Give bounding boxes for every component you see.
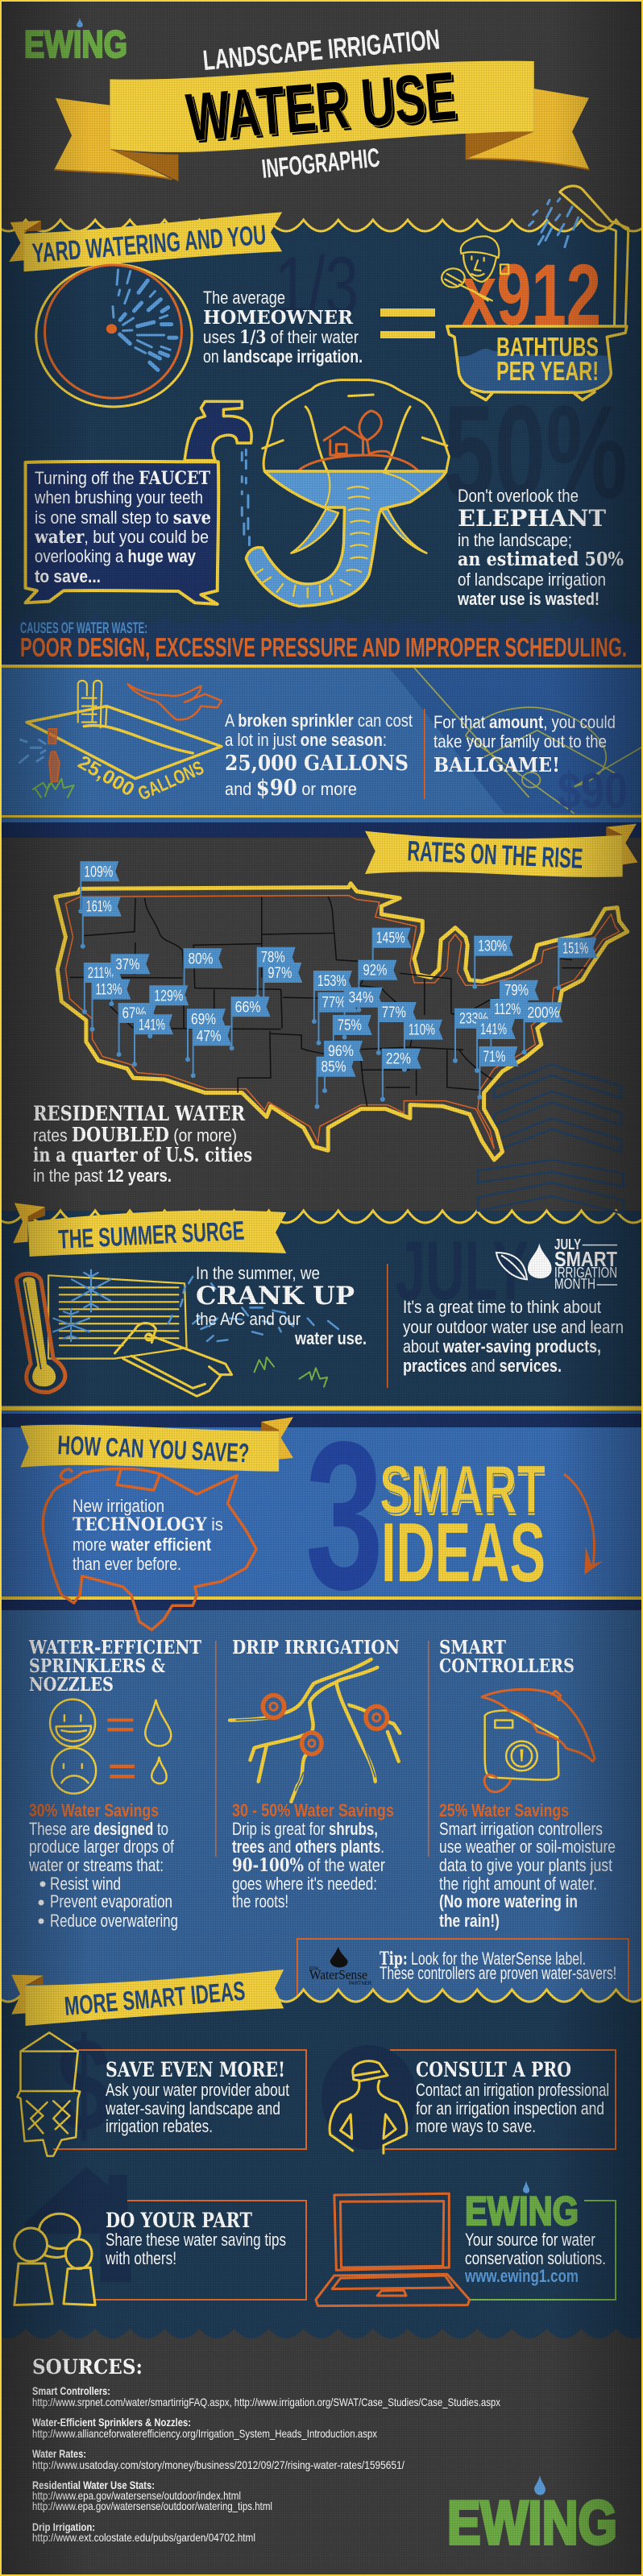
sources list [32, 2384, 500, 2544]
text: ballgame: take your family out to the [434, 731, 607, 752]
banner: summer surge [13, 1203, 286, 1257]
text [105, 2209, 286, 2268]
text: crank up [196, 1263, 367, 1348]
heading [439, 1637, 575, 1677]
icon: orange arrow [564, 1474, 603, 1575]
text: new irrigation technology: than ever before. [73, 1554, 181, 1574]
flag 145% [371, 928, 412, 980]
heading [28, 1637, 201, 1696]
text: www.ewing1.com [464, 2266, 579, 2286]
text: elephant [457, 486, 624, 609]
title ribbon [54, 61, 589, 181]
sources list: http://www.epa.gov/watersense/outdoor/watering_tips.html [32, 2499, 272, 2512]
flag 67% [117, 1003, 158, 1057]
logo: July smart irrigation month [496, 1236, 617, 1292]
flag 97%: 97% [268, 965, 292, 982]
text: great time: about water-saving products, [403, 1336, 601, 1356]
flag 69% [185, 1008, 226, 1062]
text: residential water: rates DOUBLED (or more) [33, 1123, 237, 1146]
flag 141% east [475, 1019, 516, 1073]
body text: Drip is great for shrubs, [232, 1819, 378, 1839]
heading: WATER-EFFICIENT [28, 1637, 201, 1659]
savings: 25% Water Savings [439, 1800, 569, 1820]
text: ballgame [434, 712, 616, 777]
text: broken sprinkler [225, 710, 413, 801]
text: tip [380, 1949, 616, 1983]
sources list: Water Rates: [32, 2447, 86, 2460]
text: smart: SMART [382, 1454, 546, 1530]
flag 77% [316, 992, 358, 1046]
text: elephant: in the landscape; [458, 530, 572, 550]
flag 161% [81, 897, 122, 949]
sources heading: SOURCES: [32, 2355, 143, 2379]
text: ideas: IDEAS [381, 1506, 546, 1600]
icon: roots [230, 1659, 400, 1802]
text: CONSULT A PRO [416, 2058, 571, 2081]
faucet and speech box [26, 401, 251, 604]
heading: SMART [439, 1637, 506, 1659]
body text: the roots! [232, 1891, 288, 1911]
flag 80%: 80% [189, 950, 214, 967]
flag 96% [322, 1041, 363, 1093]
body text: These are designed to [29, 1819, 168, 1839]
shower and bathtub [442, 186, 628, 400]
body text: Reduce overwatering [50, 1911, 178, 1931]
text: irrigation rebates. [106, 2116, 213, 2136]
flag 67%: 67% [122, 1005, 147, 1022]
tip box [297, 1939, 628, 2011]
flag 97% [261, 963, 302, 1001]
text: average homeowner: The average [203, 288, 285, 308]
text: faucet [34, 468, 211, 586]
map of the United States [56, 884, 628, 1160]
body text: Smart irrigation controllers [439, 1819, 603, 1839]
text: 25,000 gallons: 25,000 [74, 752, 138, 801]
banner: more smart ideas [11, 1969, 284, 2026]
text: crank up: the A/C and our [196, 1309, 301, 1329]
flag 37%: 37% [115, 956, 139, 973]
banner: more smart ideas: MORE SMART IDEAS [63, 1976, 247, 2021]
text: smart [380, 1452, 546, 1530]
icon: thermometer, air conditioner and sprinkler [16, 1270, 338, 1396]
flag 141% east: 141% [480, 1021, 507, 1038]
icon: man with brush [442, 236, 508, 300]
banner: rates on the rise [365, 824, 637, 877]
text: great time: It's a great time to think about [403, 1297, 601, 1317]
flag 92% [356, 960, 397, 1013]
flag 129% [147, 985, 189, 1038]
banner: yard watering: YARD WATERING AND YOU [31, 220, 268, 269]
title: landscape irrigation: LANDSCAPE IRRIGATION [201, 23, 442, 77]
heading: NOZZLES [29, 1674, 114, 1696]
text: with others! [105, 2248, 176, 2268]
text: 25,000 gallons [74, 752, 207, 805]
sources list: http://www.allianceforwaterefficiency.org/Irrigation_System_Heads_Introduction.aspx [32, 2427, 377, 2440]
text: elephant: ELEPHANT [458, 505, 606, 532]
text: average homeowner: HOMEOWNER [203, 307, 354, 329]
panel: save even more [17, 2032, 306, 2156]
map flags [78, 861, 597, 1109]
flag 141% [132, 1014, 173, 1066]
text: water-saving landscape and [105, 2098, 280, 2118]
yellow divider lines [0, 665, 643, 1600]
title: infographic: INFOGRAPHIC [260, 143, 381, 184]
icon: faces and drops [50, 1700, 171, 1794]
flag 85%: 85% [321, 1059, 346, 1076]
icon: elephant [246, 380, 449, 607]
flag 77% east [376, 1002, 417, 1055]
flag 22%: 22% [386, 1051, 411, 1068]
text: conservation solutions. [465, 2248, 606, 2268]
logo: Ewing: EWING [465, 2189, 579, 2234]
text: faucet: overlooking a huge way [35, 546, 197, 566]
flag 141%: 141% [139, 1017, 165, 1033]
text: ballgame: For that amount, you could [434, 712, 616, 732]
body text: the right amount of water. [439, 1874, 597, 1894]
flag 233%: 233% [459, 1011, 488, 1028]
text: bathtubs per year: BATHTUBS [496, 332, 599, 362]
text: new irrigation technology: more water efficient [73, 1534, 212, 1555]
text: faucet: water, but you could be [34, 527, 209, 548]
flag 129%: 129% [154, 988, 183, 1004]
text [105, 2058, 289, 2136]
logo: WaterSense: PARTNER [349, 1982, 372, 1986]
body text: goes where it's needed: [232, 1874, 377, 1894]
flag 113%: 113% [95, 982, 122, 999]
text [416, 2058, 609, 2136]
panel: do your part [15, 2201, 306, 2305]
flag 66% [230, 996, 271, 1050]
flag 109% [78, 861, 119, 913]
text: new irrigation technology: TECHNOLOGY is [73, 1514, 223, 1535]
summer surge wave [0, 1211, 643, 1407]
flag 110%: 110% [409, 1022, 435, 1039]
body text [232, 1819, 385, 1911]
sources list: Drip Irrigation: [32, 2520, 95, 2533]
icon: sprinkler circle [36, 264, 192, 407]
flag 71%: 71% [483, 1049, 505, 1066]
sources list: Smart Controllers: [32, 2384, 110, 2397]
sources list: http://www.usatoday.com/story/money/business/2012/09/27/rising-water-rates/1595651/ [32, 2458, 404, 2471]
flag 151%: 151% [562, 940, 588, 957]
sources list: Residential Water Use Stats: [32, 2479, 155, 2491]
text: crank up: CRANK UP [196, 1282, 355, 1311]
flag 200% [522, 1002, 562, 1054]
panel: baseball field background [390, 668, 643, 814]
logo: July smart irrigation month: JULY [554, 1236, 581, 1253]
column: sprinklers and nozzles [28, 1637, 201, 1931]
text: residential water: in the past 12 years. [33, 1166, 172, 1186]
flag 75% [331, 1015, 372, 1067]
text: smart: SMART [380, 1452, 546, 1527]
flag 110% [402, 1020, 443, 1072]
body text: water or streams that: [28, 1855, 164, 1875]
text: crank up: water use. [294, 1328, 367, 1348]
panel: consult a pro [330, 2050, 616, 2153]
flag 47% [191, 1025, 232, 1078]
text: average homeowner [203, 288, 363, 367]
flag 96%: 96% [328, 1043, 354, 1060]
ghost chevrons [478, 1065, 624, 1214]
sources list: http://www.epa.gov/watersense/outdoor/index.html [32, 2489, 241, 2502]
body text [439, 1819, 616, 1931]
flag 37% [109, 954, 150, 1006]
savings: 30% Water Savings [29, 1800, 159, 1820]
body text: Resist wind [50, 1874, 121, 1894]
flag 78%: 78% [261, 950, 285, 967]
text: Share these water saving tips [106, 2230, 286, 2250]
flag 85% [314, 1057, 356, 1109]
flag 161%: 161% [86, 899, 112, 916]
text: faucet: to save... [35, 566, 101, 586]
flag 145%: 145% [376, 930, 405, 947]
sources list: http://www.ext.colostate.edu/pubs/garden/04702.html [32, 2531, 255, 2544]
flag 77%: 77% [322, 995, 346, 1012]
banner: how can you save: HOW CAN YOU SAVE? [57, 1430, 250, 1468]
flag 113% [90, 979, 131, 1032]
navy scalloped bottom edge [0, 596, 643, 624]
text: causes of water waste [20, 620, 627, 662]
navy scalloped bottom edge [0, 2296, 643, 2338]
flag 200%: 200% [527, 1004, 560, 1021]
icon: piggy bank [43, 1468, 256, 1630]
more ideas wave region [0, 1990, 643, 2304]
text [464, 2230, 606, 2286]
banner: summer surge: THE SUMMER SURGE [58, 1216, 245, 1254]
flag 66%: 66% [235, 999, 261, 1016]
ghost icons: dollar, circle, house: $ [57, 2011, 110, 2159]
flag 78% [255, 947, 297, 1000]
text: new irrigation technology: New irrigation [73, 1496, 164, 1516]
text: broken sprinkler: 25,000 GALLONS [225, 752, 409, 776]
flag 47%: 47% [197, 1028, 222, 1045]
body text: produce larger drops of [29, 1837, 175, 1857]
text: elephant: an estimated 50% [458, 549, 624, 570]
text: 25,000 gallons: GALLONS [135, 757, 207, 805]
flag 151% [556, 938, 597, 990]
flag 34% [342, 988, 384, 1040]
text: residential water: in a quarter of U.S. cities [33, 1143, 252, 1166]
flag 79% [500, 980, 539, 1030]
title: water use [184, 57, 461, 158]
flag 153% [312, 971, 353, 1024]
flag 80% [182, 948, 222, 1000]
logo: July smart irrigation month: SMART [554, 1247, 617, 1271]
sources list: http://www.srpnet.com/water/smartirrigFAQ.aspx, http://www.irrigation.org/SWAT/Case_Studies/Case_Studies.aspx [32, 2396, 500, 2408]
icon: laptop [316, 2193, 470, 2306]
text: ballgame: BALLGAME! [434, 753, 560, 777]
column: smart controllers [439, 1637, 616, 1931]
body text: trees and others plants. [232, 1837, 384, 1857]
text: residential water [33, 1102, 252, 1186]
panel: ewing solutions [316, 2180, 616, 2306]
body text: 90-100% of the water [232, 1855, 385, 1876]
text: elephant: Don't overlook the [458, 486, 579, 506]
icon: family [15, 2214, 95, 2305]
EWING logo top: EWING [24, 23, 127, 65]
text: residential water: RESIDENTIAL WATER [33, 1102, 245, 1125]
banner: yard watering [9, 212, 282, 271]
flag 153%: 153% [317, 973, 346, 990]
flag 112% [490, 999, 529, 1049]
title: water use: WATER USE [186, 60, 461, 158]
flag 75%: 75% [338, 1017, 362, 1034]
body text: Prevent evaporation [50, 1891, 172, 1911]
sources list: Water-Efficient Sprinklers & Nozzles: [32, 2416, 191, 2429]
ghost icons: dollar, circle, house [25, 2011, 417, 2282]
flag 79%: 79% [504, 983, 529, 1000]
flag 211%: 211% [88, 965, 114, 982]
savings: 30 - 50% Water Savings [232, 1800, 394, 1820]
icon: controller and umbrella [482, 1689, 595, 1792]
flag 112%: 112% [494, 1001, 521, 1018]
flag 34%: 34% [349, 990, 374, 1007]
logo: WaterSense: WaterSense [309, 1967, 367, 1982]
flag 233% [453, 1008, 494, 1063]
body text: the rain!) [439, 1911, 500, 1931]
text: faucet: is one small step to save [35, 507, 211, 528]
text: average homeowner: uses 1/3 of their water [203, 327, 359, 348]
logo: July smart irrigation month: MONTH [554, 1276, 595, 1292]
flag 130% [472, 936, 513, 989]
text: great time [403, 1297, 624, 1376]
big 3: 3 [305, 1398, 384, 1634]
text: more ways to save. [416, 2116, 536, 2136]
text: Ask your water provider about [106, 2080, 289, 2100]
text: broken sprinkler: a lot in just one season: [225, 730, 387, 750]
flag 69%: 69% [191, 1011, 216, 1028]
text: average homeowner: on landscape irrigation. [203, 346, 363, 367]
text: SAVE EVEN MORE! [106, 2058, 285, 2081]
flag 211% [82, 963, 123, 1014]
text: Your source for water [465, 2230, 595, 2250]
text: broken sprinkler: and $90 or more [225, 776, 357, 801]
text: elephant: of landscape irrigation [458, 569, 606, 590]
icon: irrigation pro [330, 2061, 407, 2153]
ghost $90: $90 [558, 764, 628, 819]
flag 77% east: 77% [382, 1004, 406, 1021]
shower and bathtub: PER YEAR! [496, 356, 599, 386]
text: faucet: Turning off the FAUCET [35, 468, 211, 489]
heading: SPRINKLERS & [29, 1655, 165, 1677]
logo: July smart irrigation month: IRRIGATION [554, 1265, 617, 1281]
text: causes of water waste: CAUSES OF WATER WASTE: [20, 620, 147, 637]
body text: (No more watering in [439, 1891, 578, 1911]
text: faucet: when brushing your teeth [34, 487, 203, 507]
heading: CONTROLLERS [439, 1655, 575, 1677]
banner: how can you save [20, 1417, 293, 1472]
text: crank up: In the summer, we [196, 1263, 320, 1283]
body text [28, 1819, 178, 1931]
icon: water tower [17, 2032, 80, 2156]
flag 92%: 92% [363, 963, 387, 979]
text: elephant: water use is wasted! [457, 589, 599, 609]
flag 109%: 109% [84, 863, 113, 880]
text: broken sprinkler: A broken sprinkler can cost [225, 710, 413, 731]
icon: equals sign [380, 309, 435, 338]
text: DO YOUR PART [106, 2209, 252, 2232]
flag 71% [477, 1046, 518, 1100]
icon: pool with diver and broken sprinkler [19, 681, 222, 805]
heading: DRIP IRRIGATION [232, 1637, 400, 1659]
text: new irrigation technology [73, 1496, 223, 1574]
flag 130%: 130% [478, 938, 507, 955]
ghost JULY: JULY [396, 1224, 529, 1318]
flag 22% [380, 1049, 421, 1102]
logo: WaterSense [309, 1947, 372, 1986]
column: drip irrigation [230, 1637, 400, 1911]
navy wave region: yard watering [0, 220, 643, 604]
title: water use: WATER USE [184, 57, 458, 155]
ghost 1/3: 1/3 [275, 240, 359, 332]
logo: WaterSense: EPA [309, 1967, 319, 1972]
text: great time: practices and services. [403, 1356, 562, 1376]
